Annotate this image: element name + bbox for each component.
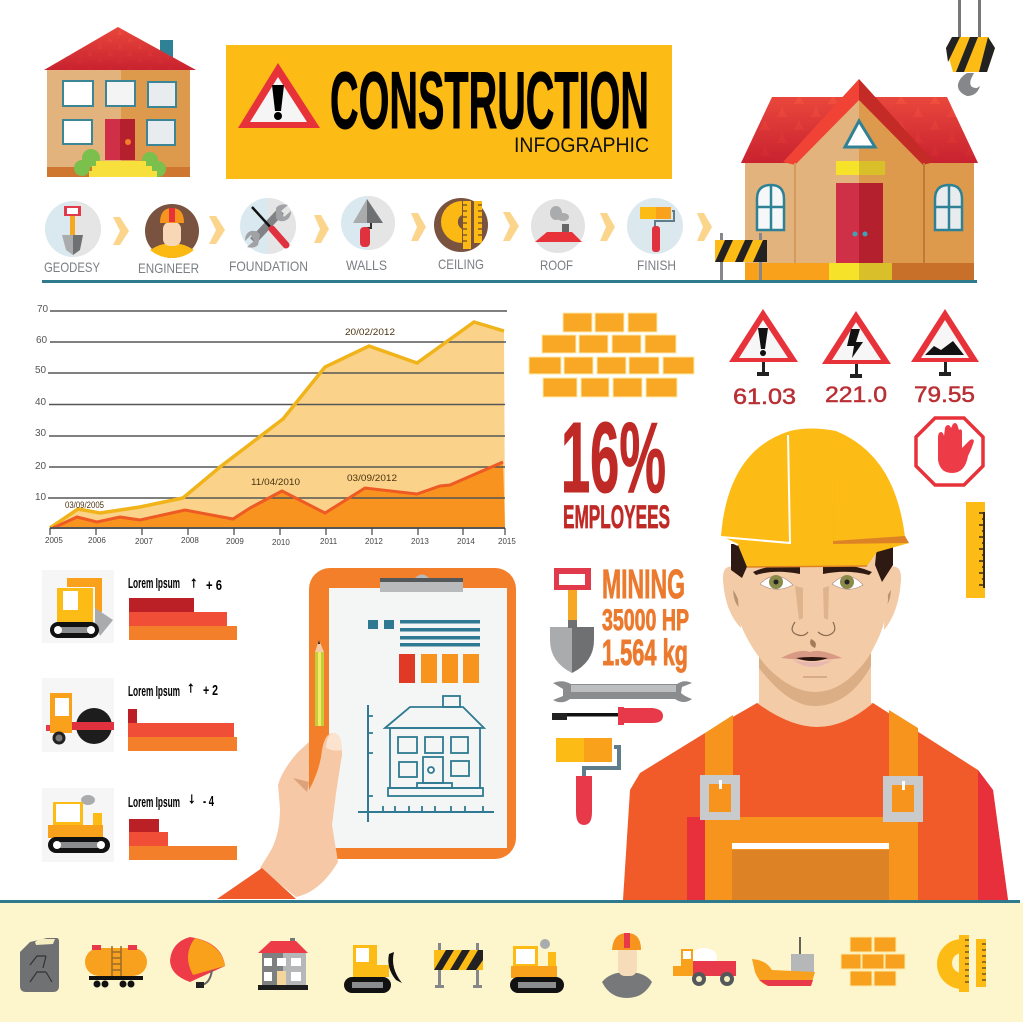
icon: ship bbox=[752, 937, 815, 986]
row: excavator: Lorem Ipsum bbox=[128, 575, 180, 592]
worker figure bbox=[623, 428, 1008, 900]
warning sign: lightning: 221.0 bbox=[825, 382, 887, 407]
icon: screwdriver bbox=[552, 707, 663, 725]
area chart: 2006 bbox=[88, 536, 106, 545]
area chart: 03/09/2005 bbox=[65, 500, 104, 510]
icon: tracked loader bbox=[48, 795, 110, 853]
area chart: 2011 bbox=[320, 537, 338, 546]
warning sign: exclamation bbox=[729, 309, 798, 409]
stat: 16% employees: EMPLOYEES bbox=[563, 499, 670, 535]
warning sign: exclamation: 61.03 bbox=[733, 384, 796, 409]
icon: crane hook bbox=[946, 0, 995, 96]
step: roof: ROOF bbox=[540, 257, 573, 273]
area chart: 2007 bbox=[135, 537, 153, 546]
text lines bbox=[368, 620, 480, 646]
arrow bbox=[697, 213, 712, 241]
stat: 16% employees bbox=[561, 402, 670, 535]
eyes and brows bbox=[753, 565, 872, 589]
clip bbox=[380, 574, 463, 592]
icon: brick wall bbox=[529, 313, 694, 397]
icon: tracked excavator bbox=[510, 939, 564, 993]
icon: hand holding clipboard bbox=[217, 733, 342, 899]
step: ceiling bbox=[434, 198, 488, 272]
step: ceiling: CEILING bbox=[438, 256, 484, 272]
pencil bbox=[315, 640, 324, 726]
arrow bbox=[600, 213, 615, 241]
icon: fuel tank bbox=[85, 945, 147, 988]
step: geodesy bbox=[44, 201, 101, 275]
icon: ruler bbox=[966, 502, 985, 598]
area chart: 20/02/2012 bbox=[345, 327, 395, 337]
face bbox=[737, 545, 888, 692]
icon: warning triangle bbox=[238, 63, 320, 128]
warning sign: bumpy road: 79.55 bbox=[914, 382, 975, 407]
row: tracked loader bbox=[42, 788, 237, 862]
icon: shovel bbox=[550, 568, 594, 673]
area chart: 2008 bbox=[181, 536, 199, 545]
light area series bbox=[50, 322, 505, 528]
title banner bbox=[226, 45, 672, 179]
icon: stop hand sign bbox=[916, 418, 983, 485]
row: road roller: ↑ bbox=[187, 679, 194, 696]
arrow bbox=[314, 215, 329, 243]
icon: wrench bbox=[553, 681, 692, 702]
bar chart bbox=[128, 709, 237, 751]
icon: bricks bbox=[841, 937, 905, 986]
row: road roller: + 2 bbox=[203, 682, 218, 699]
icon: safety helmet bbox=[170, 937, 225, 988]
row: excavator bbox=[42, 570, 237, 643]
row: tracked loader: Lorem Ipsum bbox=[128, 794, 180, 811]
step: finish: FINISH bbox=[637, 257, 676, 273]
warning sign: lightning bbox=[822, 311, 891, 407]
step: foundation: FOUNDATION bbox=[229, 258, 308, 274]
hair bbox=[731, 544, 750, 578]
area chart: 2010 bbox=[272, 538, 290, 547]
warning sign: bumpy road bbox=[911, 309, 979, 407]
icon: large house bbox=[741, 79, 978, 280]
arrow bbox=[209, 216, 225, 244]
neck bbox=[757, 650, 873, 727]
step: engineer: ENGINEER bbox=[138, 260, 199, 276]
area chart bbox=[35, 304, 516, 547]
stat: mining: 35000 HP bbox=[602, 604, 689, 637]
steps baseline bbox=[42, 280, 977, 283]
arrow bbox=[113, 217, 129, 245]
torso bbox=[623, 703, 1008, 900]
icon: excavator bbox=[50, 578, 113, 638]
step: engineer bbox=[138, 204, 199, 276]
arrow bbox=[503, 212, 519, 241]
nose bbox=[792, 586, 835, 648]
area chart: 2009 bbox=[226, 537, 244, 546]
icon: townhouse bbox=[258, 938, 308, 990]
step: geodesy: GEODESY bbox=[44, 259, 101, 275]
hard hat bbox=[721, 428, 909, 567]
subtitle: INFOGRAPHIC bbox=[514, 134, 649, 157]
area chart: 30 bbox=[35, 428, 47, 439]
row: excavator: + 6 bbox=[206, 577, 222, 594]
area chart: 70 bbox=[37, 304, 49, 315]
overalls bbox=[700, 710, 923, 900]
bar chart bbox=[129, 598, 237, 640]
area chart: 11/04/2010 bbox=[251, 477, 300, 487]
area chart: 2013 bbox=[411, 537, 429, 546]
clipboard bbox=[309, 568, 516, 859]
area chart: 03/09/2012 bbox=[347, 473, 397, 483]
icon: paint roller bbox=[556, 738, 619, 825]
area chart: 60 bbox=[36, 335, 48, 346]
icon: barrier bbox=[434, 943, 483, 988]
mouth bbox=[781, 651, 842, 677]
area chart: 20 bbox=[35, 461, 47, 472]
icon: bulldozer bbox=[344, 945, 402, 993]
area chart: 2015 bbox=[498, 537, 516, 546]
icon: protractor and rulers bbox=[937, 935, 986, 992]
door bbox=[836, 183, 883, 263]
area chart: 2005 bbox=[45, 536, 63, 545]
step: walls bbox=[341, 196, 395, 273]
area chart: 2012 bbox=[365, 537, 383, 546]
icon: dump truck bbox=[673, 948, 736, 986]
icon: road roller bbox=[46, 693, 114, 744]
step: foundation bbox=[229, 198, 308, 274]
bottom icon strip bbox=[0, 900, 1023, 1022]
area chart: 50 bbox=[35, 365, 47, 376]
row: tracked loader: - 4 bbox=[203, 793, 214, 810]
title banner: CONSTRUCTION bbox=[330, 56, 649, 146]
attic window bbox=[845, 121, 875, 147]
arrow bbox=[411, 213, 426, 241]
left window bbox=[757, 185, 784, 230]
step: finish bbox=[627, 198, 683, 273]
stat: mining bbox=[602, 561, 689, 673]
bars bbox=[399, 654, 479, 683]
icon: jerry can bbox=[20, 938, 59, 992]
area chart: 10 bbox=[35, 492, 47, 503]
stat: mining: MINING bbox=[602, 561, 685, 607]
ears bbox=[723, 566, 741, 628]
stat: mining: 1.564 kg bbox=[602, 632, 688, 673]
step: walls: WALLS bbox=[346, 257, 387, 273]
bar chart bbox=[129, 819, 237, 860]
right window bbox=[935, 185, 962, 230]
dark area series bbox=[53, 462, 505, 528]
row: road roller bbox=[42, 678, 237, 752]
row: road roller: Lorem Ipsum bbox=[128, 683, 180, 700]
area chart: 2014 bbox=[457, 537, 475, 546]
sleeve bbox=[217, 868, 296, 899]
blueprint house bbox=[358, 696, 494, 822]
icon: two-storey house bbox=[44, 27, 196, 177]
icon: road barrier bbox=[715, 233, 767, 280]
step: roof bbox=[531, 199, 585, 273]
row: excavator: ↑ bbox=[190, 574, 198, 591]
row: tracked loader: ↓ bbox=[188, 790, 196, 807]
icon: worker bbox=[602, 933, 652, 998]
stat: 16% employees: 16% bbox=[561, 402, 666, 514]
area chart: 40 bbox=[35, 397, 47, 408]
